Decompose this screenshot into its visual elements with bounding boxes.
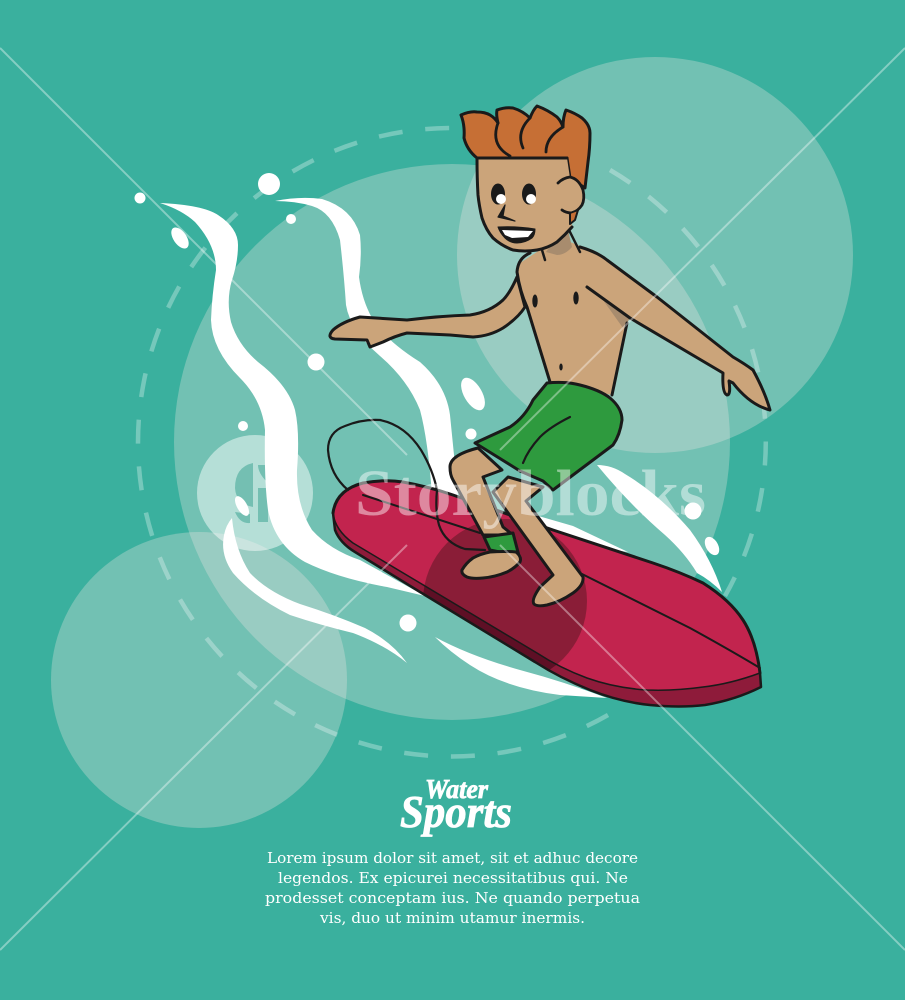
- shorts: [475, 382, 622, 490]
- surfboard leash: [328, 420, 485, 550]
- body text: prodesset conceptam ius. Ne quando perpetua: [265, 891, 640, 907]
- watermark text: Storyblocks: [355, 457, 706, 530]
- torso: [516, 240, 630, 395]
- body text: vis, duo ut minim utamur inermis.: [319, 911, 585, 927]
- teeth: [502, 230, 533, 238]
- hair behind ear: [570, 210, 578, 224]
- body text: legendos. Ex epicurei necessitatibus qui. Ne: [278, 871, 628, 887]
- board side: [333, 513, 761, 706]
- ankle band: [484, 533, 519, 556]
- body text: [265, 851, 640, 927]
- board outlines: [333, 481, 761, 706]
- right arm fill: [560, 245, 770, 410]
- nose: [498, 205, 515, 221]
- mouth: [498, 227, 535, 243]
- deck shadow: [424, 519, 587, 664]
- front leg: [493, 477, 583, 606]
- hair strands: [496, 118, 563, 156]
- title: Water: [425, 774, 488, 804]
- ear outline: [558, 177, 584, 213]
- background circles: [51, 57, 853, 828]
- watermark logo: [197, 435, 313, 551]
- board deck: [333, 481, 760, 690]
- water droplets: [134, 173, 722, 632]
- shorts crease: [523, 417, 570, 463]
- arm and neck shadows: [546, 230, 630, 328]
- left arm: [330, 277, 525, 347]
- back foot: [462, 552, 520, 578]
- ear: [558, 177, 584, 213]
- eyes: [491, 184, 536, 204]
- body text: Lorem ipsum dolor sit amet, sit et adhuc decore: [267, 851, 638, 867]
- white water splashes: [134, 173, 722, 698]
- board side shadow: [424, 586, 556, 670]
- dashed ring: [138, 128, 766, 756]
- hair: [461, 106, 590, 188]
- head: [477, 158, 572, 251]
- surfer: [330, 106, 770, 606]
- head outline: [477, 158, 572, 251]
- body outlines: [517, 228, 770, 410]
- chest marks: [532, 292, 579, 370]
- title: Sports: [400, 786, 512, 837]
- back leg: [450, 448, 513, 535]
- surfboard: [333, 481, 761, 706]
